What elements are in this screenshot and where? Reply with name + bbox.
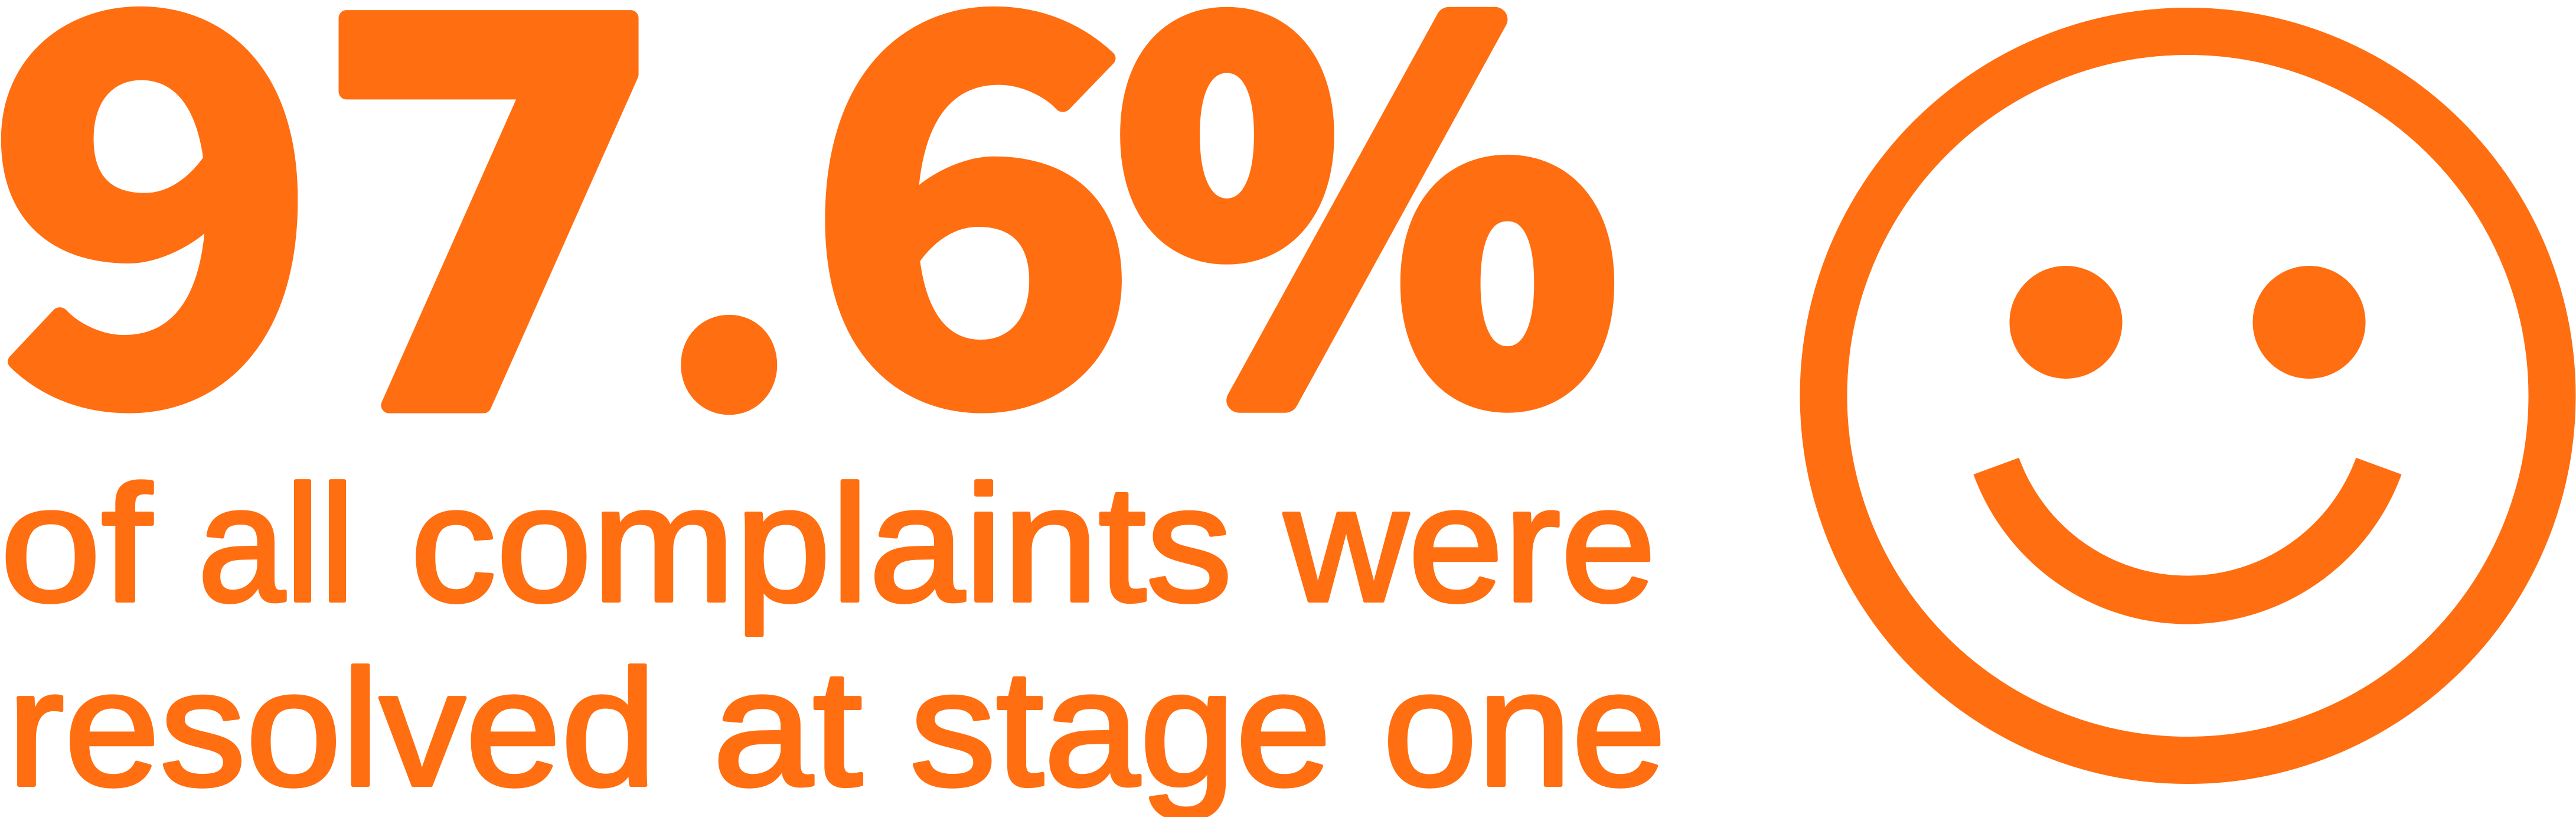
- caption: of all complaints were resolved at stage one: were: [1281, 452, 1656, 636]
- right eye: [2253, 266, 2365, 379]
- caption: of all complaints were resolved at stage one: at: [713, 636, 863, 817]
- icon: smiley face: [1823, 31, 2552, 760]
- smile: [1996, 466, 2379, 600]
- left eye: [2010, 266, 2122, 379]
- caption: of all complaints were resolved at stage one: stage: [910, 636, 1331, 817]
- caption: of all complaints were resolved at stage one: of: [0, 452, 152, 636]
- caption: of all complaints were resolved at stage one: complaints: [410, 452, 1232, 637]
- caption: of all complaints were resolved at stage one: all: [198, 452, 355, 636]
- headline figure: 97.6%: [0, 0, 1618, 549]
- caption: of all complaints were resolved at stage one: [0, 452, 1666, 817]
- caption: of all complaints were resolved at stage one: resolved: [7, 636, 657, 817]
- face outline: [1823, 31, 2552, 760]
- caption: of all complaints were resolved at stage one: one: [1383, 636, 1666, 817]
